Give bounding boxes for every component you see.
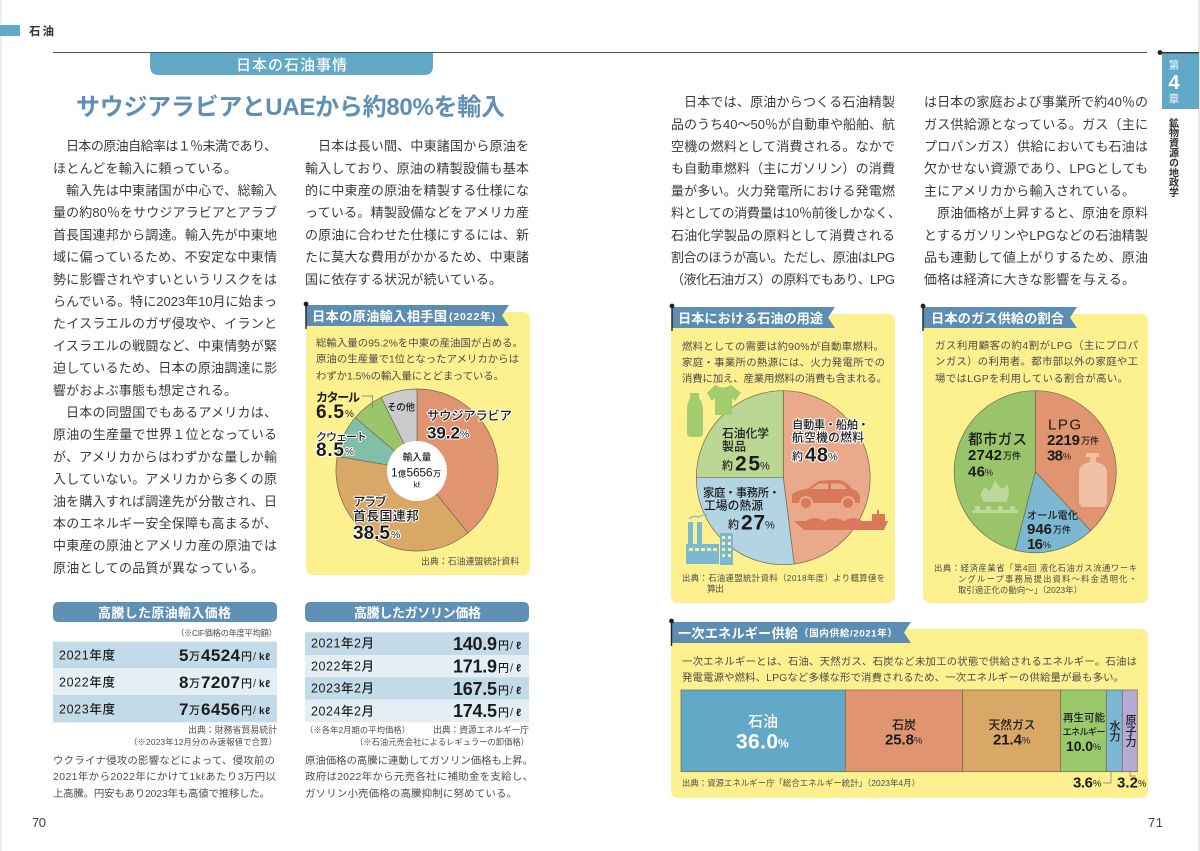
section tab: 日本の石油事情	[236, 57, 347, 74]
pie labels	[968, 416, 1099, 553]
body text column 3: 空機の燃料として消費される。なかで	[671, 139, 895, 154]
table: gasoline prices: 政府は2022年から元売各社に補助金を支給し、	[305, 770, 533, 783]
row 2021: 140.9	[453, 634, 497, 654]
panel: crude import partners: 総輸入量の95.2%を中東の産油国が占める。	[316, 336, 523, 349]
row 2023: 円	[498, 684, 509, 697]
panel: gas supply share: 出典：経済産業省「第4回 液化石油ガス流通ワーキ	[934, 563, 1137, 573]
row 2021	[59, 646, 270, 665]
row 2022	[311, 656, 521, 676]
pie labels: %	[1043, 540, 1051, 550]
body text column 1: らんでいる。特に2023年10月に始まっ	[53, 294, 277, 309]
pie labels: 6.5	[316, 402, 344, 423]
pie labels: 石油化学	[722, 426, 769, 440]
icon: plastic bottle	[687, 393, 703, 437]
bar labels: 石炭	[892, 717, 916, 732]
bar labels: %	[1093, 778, 1102, 790]
pie labels: 家庭・事務所・	[703, 486, 780, 500]
body text column 2: っている。精製設備などをアメリカ産	[305, 205, 529, 220]
running header	[0, 24, 54, 38]
body text column 2: の原油に合わせた仕様にするには、新	[305, 227, 529, 242]
body text column 1: ほとんどを輸入に頼っている。	[53, 161, 237, 176]
body text column 1	[53, 139, 277, 575]
pie labels: 約	[792, 449, 803, 463]
row 2021	[311, 634, 521, 654]
pie labels: %	[828, 452, 838, 464]
panel: oil usage in Japan: 日本における石油の用途	[678, 310, 823, 326]
bar labels: 3.2	[1117, 774, 1138, 792]
panel: crude import partners: 出典：石油連盟統計資料	[421, 556, 519, 566]
bar labels: %	[1138, 778, 1147, 790]
body text column 1: 勢に影響されやすいというリスクをは	[53, 272, 277, 287]
bar labels: %	[914, 736, 923, 746]
row 2022: 8	[179, 673, 188, 692]
row 2023: /	[253, 705, 257, 717]
row 2024: 2024年2月	[311, 704, 374, 718]
panel: gas supply share: 日本のガス供給の割合	[931, 310, 1064, 326]
bar labels: エネルギー	[1062, 727, 1106, 737]
pie labels: 万件	[1081, 435, 1099, 446]
panel: primary energy supply: 発電電源や燃料、LPGなど多様な形で消費されるため、一次エネルギーの供給量が最も多い。	[682, 671, 1124, 684]
panel: gas supply share	[921, 304, 1148, 603]
panel: oil usage in Japan: 出典：石油連盟統計資料（2018年度）より概算値を	[682, 573, 885, 583]
icon: car	[792, 480, 860, 509]
bar labels: 36.0	[736, 730, 778, 754]
row 2024: 174.5	[453, 701, 497, 721]
pie labels: 8.5	[316, 440, 344, 461]
pie labels: 約	[728, 517, 739, 531]
running header: 石 油	[29, 24, 54, 38]
body text column 1: 響がおよぶ事態も想定される。	[53, 383, 237, 398]
row 2023: 円	[241, 704, 252, 717]
row 2021: kℓ	[259, 652, 270, 663]
bar labels: 10.0	[1066, 738, 1093, 754]
pie chart: gas supply	[954, 391, 1116, 553]
pie labels: %	[760, 460, 770, 472]
panel: oil usage in Japan: 消費に加え、産業用燃料の消費も含まれる。	[682, 372, 887, 385]
pie labels: 首長国連邦	[353, 508, 419, 524]
table: crude import prices: 2021年から2022年にかけて1kℓあたり3万円以	[53, 770, 277, 783]
row 2022: 171.9	[453, 656, 497, 676]
body text column 1: 原油としての品質が異なっている。	[53, 560, 264, 575]
row 2021: ℓ	[516, 640, 521, 652]
row 2023: 167.5	[453, 679, 497, 699]
pie labels: オール電化	[1027, 510, 1078, 522]
bar labels: 21.4	[993, 732, 1023, 748]
row 2021: /	[253, 651, 257, 663]
row 2023: 7	[179, 700, 188, 719]
panel: oil usage in Japan	[670, 304, 895, 603]
body text column 1: 中東産の原油とアメリカ産の原油では	[53, 538, 277, 553]
pie labels: %	[391, 529, 400, 541]
body text column 2: 日本は長い間、中東諸国から原油を	[318, 139, 529, 154]
body text column 2: たに莫大な費用がかかるため、中東諸	[305, 250, 529, 265]
row 2021: 2021年2月	[311, 636, 374, 650]
panel: gas supply share: 場ではLGPを利用している割合が高い。	[935, 372, 1128, 385]
pie labels: %	[985, 468, 993, 478]
body text column 3: 料としての消費量は10％前後しかなく、	[671, 206, 901, 221]
body text column 1: 本のエネルギー安全保障も高まるが、	[53, 516, 277, 531]
body text column 2: 輸入しており、原油の精製設備も基本	[305, 161, 529, 176]
row 2021: /	[510, 640, 514, 652]
body text column 3: 品のうち40〜50％が自動車や船舶、航	[671, 117, 895, 132]
pie labels: 万	[433, 470, 441, 478]
pie labels: 25	[735, 452, 760, 476]
pie labels: %	[460, 428, 469, 440]
row 2023	[311, 679, 521, 699]
row 2022: 円	[498, 662, 509, 674]
body text column 4	[924, 95, 1148, 287]
body text column 1: イスラエルの戦闘など、中東情勢が緊	[53, 338, 277, 353]
pie labels: 工場の熱源	[704, 498, 763, 512]
bar labels: 25.8	[885, 732, 914, 748]
chapter tab	[1158, 50, 1199, 109]
bar labels: 石油	[748, 714, 778, 730]
panel: primary energy supply: 一次エネルギー供給	[678, 625, 799, 641]
panel: gas supply share: ンガス）の利用者。都市部以外の家庭や工	[935, 355, 1138, 368]
row 2024: ℓ	[516, 707, 521, 719]
pie labels: %	[345, 447, 354, 458]
row 2021: 2021年度	[59, 648, 115, 662]
pie labels: 自動車・船舶・	[792, 418, 869, 432]
body text column 4: 原油価格が上昇すると、原油を原料	[937, 206, 1148, 221]
row 2023: 2023年度	[59, 702, 115, 716]
panel: crude import partners: 日本の原油輸入相手国	[312, 308, 447, 324]
body text column 1: 首長国連邦から調達。輸入先が中東地	[53, 227, 277, 242]
pie labels: サウジアラビア	[427, 409, 512, 423]
bar labels: %	[1022, 736, 1031, 746]
bar labels: 再生可能	[1063, 711, 1105, 724]
row 2022: kℓ	[259, 679, 270, 690]
panel: oil usage in Japan: 算出	[707, 583, 724, 594]
row 2023: 2023年2月	[311, 682, 374, 696]
pie labels: 1	[391, 466, 398, 480]
row 2023: /	[510, 685, 514, 697]
body text column 1: 油を購入すれば調達先が分散され、日	[53, 494, 277, 509]
bar labels: %	[1093, 742, 1101, 752]
bar labels: 原子力	[1124, 714, 1136, 748]
bar labels: 天然ガス	[988, 718, 1036, 732]
pie labels	[316, 390, 512, 544]
body text column 3: 量が多い。火力発電所における発電燃	[671, 183, 895, 198]
section tab	[150, 53, 433, 75]
pie labels: 万件	[1053, 524, 1071, 535]
pie labels: 48	[805, 444, 828, 466]
pie labels: 38.5	[353, 523, 390, 544]
pie labels: 都市ガス	[968, 430, 1027, 448]
panel: primary energy supply	[669, 619, 1148, 798]
row 2021: 万	[189, 650, 200, 663]
table: crude import prices: 出典：財務省貿易統計	[188, 724, 277, 735]
row 2022: 2022年度	[59, 674, 115, 690]
table: crude import prices: 上高騰。円安もあり2023年も高値で推移した。	[53, 787, 270, 800]
row 2022: /	[253, 678, 257, 690]
body text column 4: 価格は経済に大きな影響を与える。	[924, 272, 1135, 287]
pie labels: 946	[1027, 521, 1052, 538]
body text column 3: 日本では、原油からつくる石油精製	[684, 95, 895, 110]
bar labels: 3.6	[1073, 774, 1093, 792]
table: gasoline prices: 出典：資源エネルギー庁	[433, 724, 529, 735]
panel: crude import partners: わずか1.5%の輸入量にとどまっている。	[316, 370, 504, 383]
table: gasoline prices: （※各年2月期の平均価格）	[305, 725, 410, 735]
pie labels: 5656	[406, 466, 433, 480]
body text column 3: 割合のほうが高い。ただし、原油はLPG	[671, 250, 895, 265]
body text column 1: 量の約80％をサウジアラビアとアラブ	[53, 205, 277, 220]
chapter tab: 第	[1169, 58, 1180, 72]
bar labels: 水力	[1108, 719, 1120, 743]
bar labels: %	[778, 736, 789, 750]
panel: crude import partners: (2022年)	[449, 310, 495, 323]
body text column 2	[305, 139, 529, 287]
table: crude import prices: 高騰した原油輸入価格	[98, 606, 231, 621]
chapter tab: 4	[1168, 72, 1180, 94]
body text column 3: 石油化学製品の原料として消費される	[671, 228, 895, 243]
pie labels: 製品	[722, 440, 746, 454]
body text column 1: 域に偏っているため、不安定な中東情	[53, 250, 277, 265]
row 2023	[59, 700, 270, 719]
table: crude import prices: ウクライナ侵攻の影響などによって、侵攻前の	[53, 754, 275, 767]
row 2023: 万	[189, 704, 200, 717]
bar labels	[736, 711, 1147, 792]
pie labels: 航空機の燃料	[792, 430, 864, 444]
page number right: 71	[1148, 815, 1163, 830]
row 2021: 5	[179, 646, 188, 665]
panel: primary energy supply: （国内供給/2021年）	[799, 628, 897, 640]
pie labels: その他	[387, 402, 415, 414]
pie labels: 万件	[1003, 450, 1021, 461]
body text column 1: 輸入先は中東諸国が中心で、総輸入	[66, 183, 277, 198]
pie labels: 39.2	[427, 424, 460, 442]
page number left: 70	[32, 815, 46, 830]
pie labels: クウェート	[316, 430, 367, 444]
row 2022: 2022年2月	[311, 660, 374, 674]
body text column 4: プロパンガス）供給においても石油は	[924, 139, 1148, 154]
body text column 1: 入していない。アメリカから多くの原	[53, 472, 277, 487]
panel: oil usage in Japan: 家庭・事業所の熱源には、火力発電所での	[682, 356, 885, 369]
row 2024: 円	[498, 706, 509, 719]
pie labels: 2742	[968, 447, 1002, 464]
pie labels: 38	[1047, 448, 1063, 464]
pie labels: アラブ	[353, 494, 387, 509]
pie labels: 輸入量	[403, 452, 432, 464]
main title: サウジアラビアとUAEから約80%を輸入	[76, 94, 505, 121]
icon: factory	[686, 515, 733, 565]
body text column 4: 品も連動して値上がりするため、原油	[924, 250, 1148, 265]
body text column 1: 日本の原油自給率は１％未満であり、	[66, 139, 277, 154]
row 2023: ℓ	[516, 685, 521, 697]
body text column 4: とするガソリンやLPGなどの石油精製	[924, 228, 1148, 243]
row 2022: 7207	[201, 673, 240, 692]
pie labels: LPG	[1048, 416, 1081, 434]
body text column 4: ガス供給源となっている。ガス（主に	[924, 117, 1148, 132]
row 2024	[311, 701, 521, 721]
table: crude import prices: （※CIF価格の年度平均額）	[176, 628, 277, 638]
table: gasoline prices: 高騰したガソリン価格	[354, 606, 481, 621]
row 2024: /	[510, 707, 514, 719]
panel: gas supply share: ガス利用顧客の約4割がLPG（主にプロパ	[935, 339, 1138, 352]
body text column 4: 主にアメリカから輸入されている。	[924, 183, 1135, 198]
row 2022: ℓ	[516, 662, 521, 674]
chapter title vertical: 鉱物資源の地政学	[1166, 117, 1178, 197]
row 2022: /	[510, 662, 514, 674]
body text column 1: が、アメリカからはわずかな量しか輸	[53, 449, 277, 464]
stacked bar chart	[681, 690, 1137, 772]
panel: gas supply share: 取引適正化の動向〜」（2023年）	[958, 585, 1082, 595]
body text column 3: も自動車燃料（主にガソリン）の消費	[671, 161, 895, 176]
pie labels: 16	[1027, 536, 1043, 553]
body text column 2: 国に依存する状況が続いている。	[305, 272, 502, 287]
table: crude import prices: （※2023年12月分のみ速報値で合算）	[129, 737, 277, 747]
body text column 2: 的に中東産の原油を精製する仕様にな	[305, 183, 529, 198]
icon: gas cylinder	[1079, 453, 1107, 507]
row 2021: 円	[241, 650, 252, 663]
body text column 4: は日本の家庭および事業所で約40％の	[924, 95, 1148, 110]
row 2022: 円	[241, 677, 252, 690]
panel: crude import partners	[304, 302, 530, 575]
row 2021: 4524	[201, 646, 241, 665]
body text column 1: 原油の生産量で世界１位となっている	[53, 427, 277, 442]
table: gasoline prices: ガソリン小売価格の高騰抑制に努めている。	[305, 787, 517, 800]
pie labels: 46	[968, 464, 985, 480]
icon: t-shirt	[707, 385, 741, 415]
row 2022	[59, 673, 270, 692]
pie labels: 2219	[1047, 432, 1080, 449]
row 2023: 6456	[201, 700, 240, 719]
panel: gas supply share: ングループ事務局提出資料〜料金透明化・	[958, 574, 1137, 584]
panel: oil usage in Japan: 燃料としての需要は約90%が自動車燃料。	[682, 340, 884, 353]
table: gasoline prices: （※石油元売会社によるレギュラーの卸価格）	[355, 737, 529, 747]
table: crude import prices	[53, 602, 277, 800]
panel: primary energy supply: 一次エネルギーとは、石油、天然ガス、石炭など未加工の状態で供給されるエネルギー。石油は	[682, 655, 1137, 668]
body text column 1: 日本の同盟国でもあるアメリカは、	[66, 405, 277, 420]
table: gasoline prices	[305, 602, 533, 800]
pie labels: %	[345, 409, 354, 420]
chapter tab: 章	[1169, 92, 1180, 105]
body text column 3	[671, 95, 901, 287]
body text column 1: 迫しているため、日本の原油調達に影	[53, 361, 277, 376]
row 2021: 円	[498, 639, 509, 652]
icon: ship	[794, 510, 888, 530]
panel: primary energy supply: 出典：資源エネルギー庁「総合エネルギー統計」（2023年4月）	[682, 778, 920, 788]
pie chart: oil usage	[696, 391, 870, 565]
pie labels: 約	[722, 458, 733, 472]
body text column 4: 欠かせない資源であり、LPGとしても	[924, 161, 1148, 176]
table: gasoline prices: 原油価格の高騰に連動してガソリン価格も上昇。	[305, 754, 533, 767]
row 2023: kℓ	[259, 706, 270, 717]
pie labels: 億	[398, 468, 406, 478]
body text column 3: （液化石油ガス）の原料でもあり、LPG	[671, 272, 895, 287]
pie labels: 27	[741, 512, 765, 534]
body text column 1: たイスラエルのガザ侵攻や、イランと	[53, 316, 277, 331]
pie chart: import partners	[336, 389, 498, 551]
pie labels	[703, 418, 869, 534]
panel: crude import partners: 原油の生産量で1位となったアメリカからは	[316, 353, 519, 366]
row 2022: 万	[189, 677, 200, 690]
pie labels: %	[765, 520, 775, 532]
pie labels: %	[1063, 452, 1071, 462]
icon: gas burner flame	[972, 480, 1018, 513]
pie labels: カタール	[316, 390, 360, 404]
pie labels: kℓ	[414, 480, 421, 490]
